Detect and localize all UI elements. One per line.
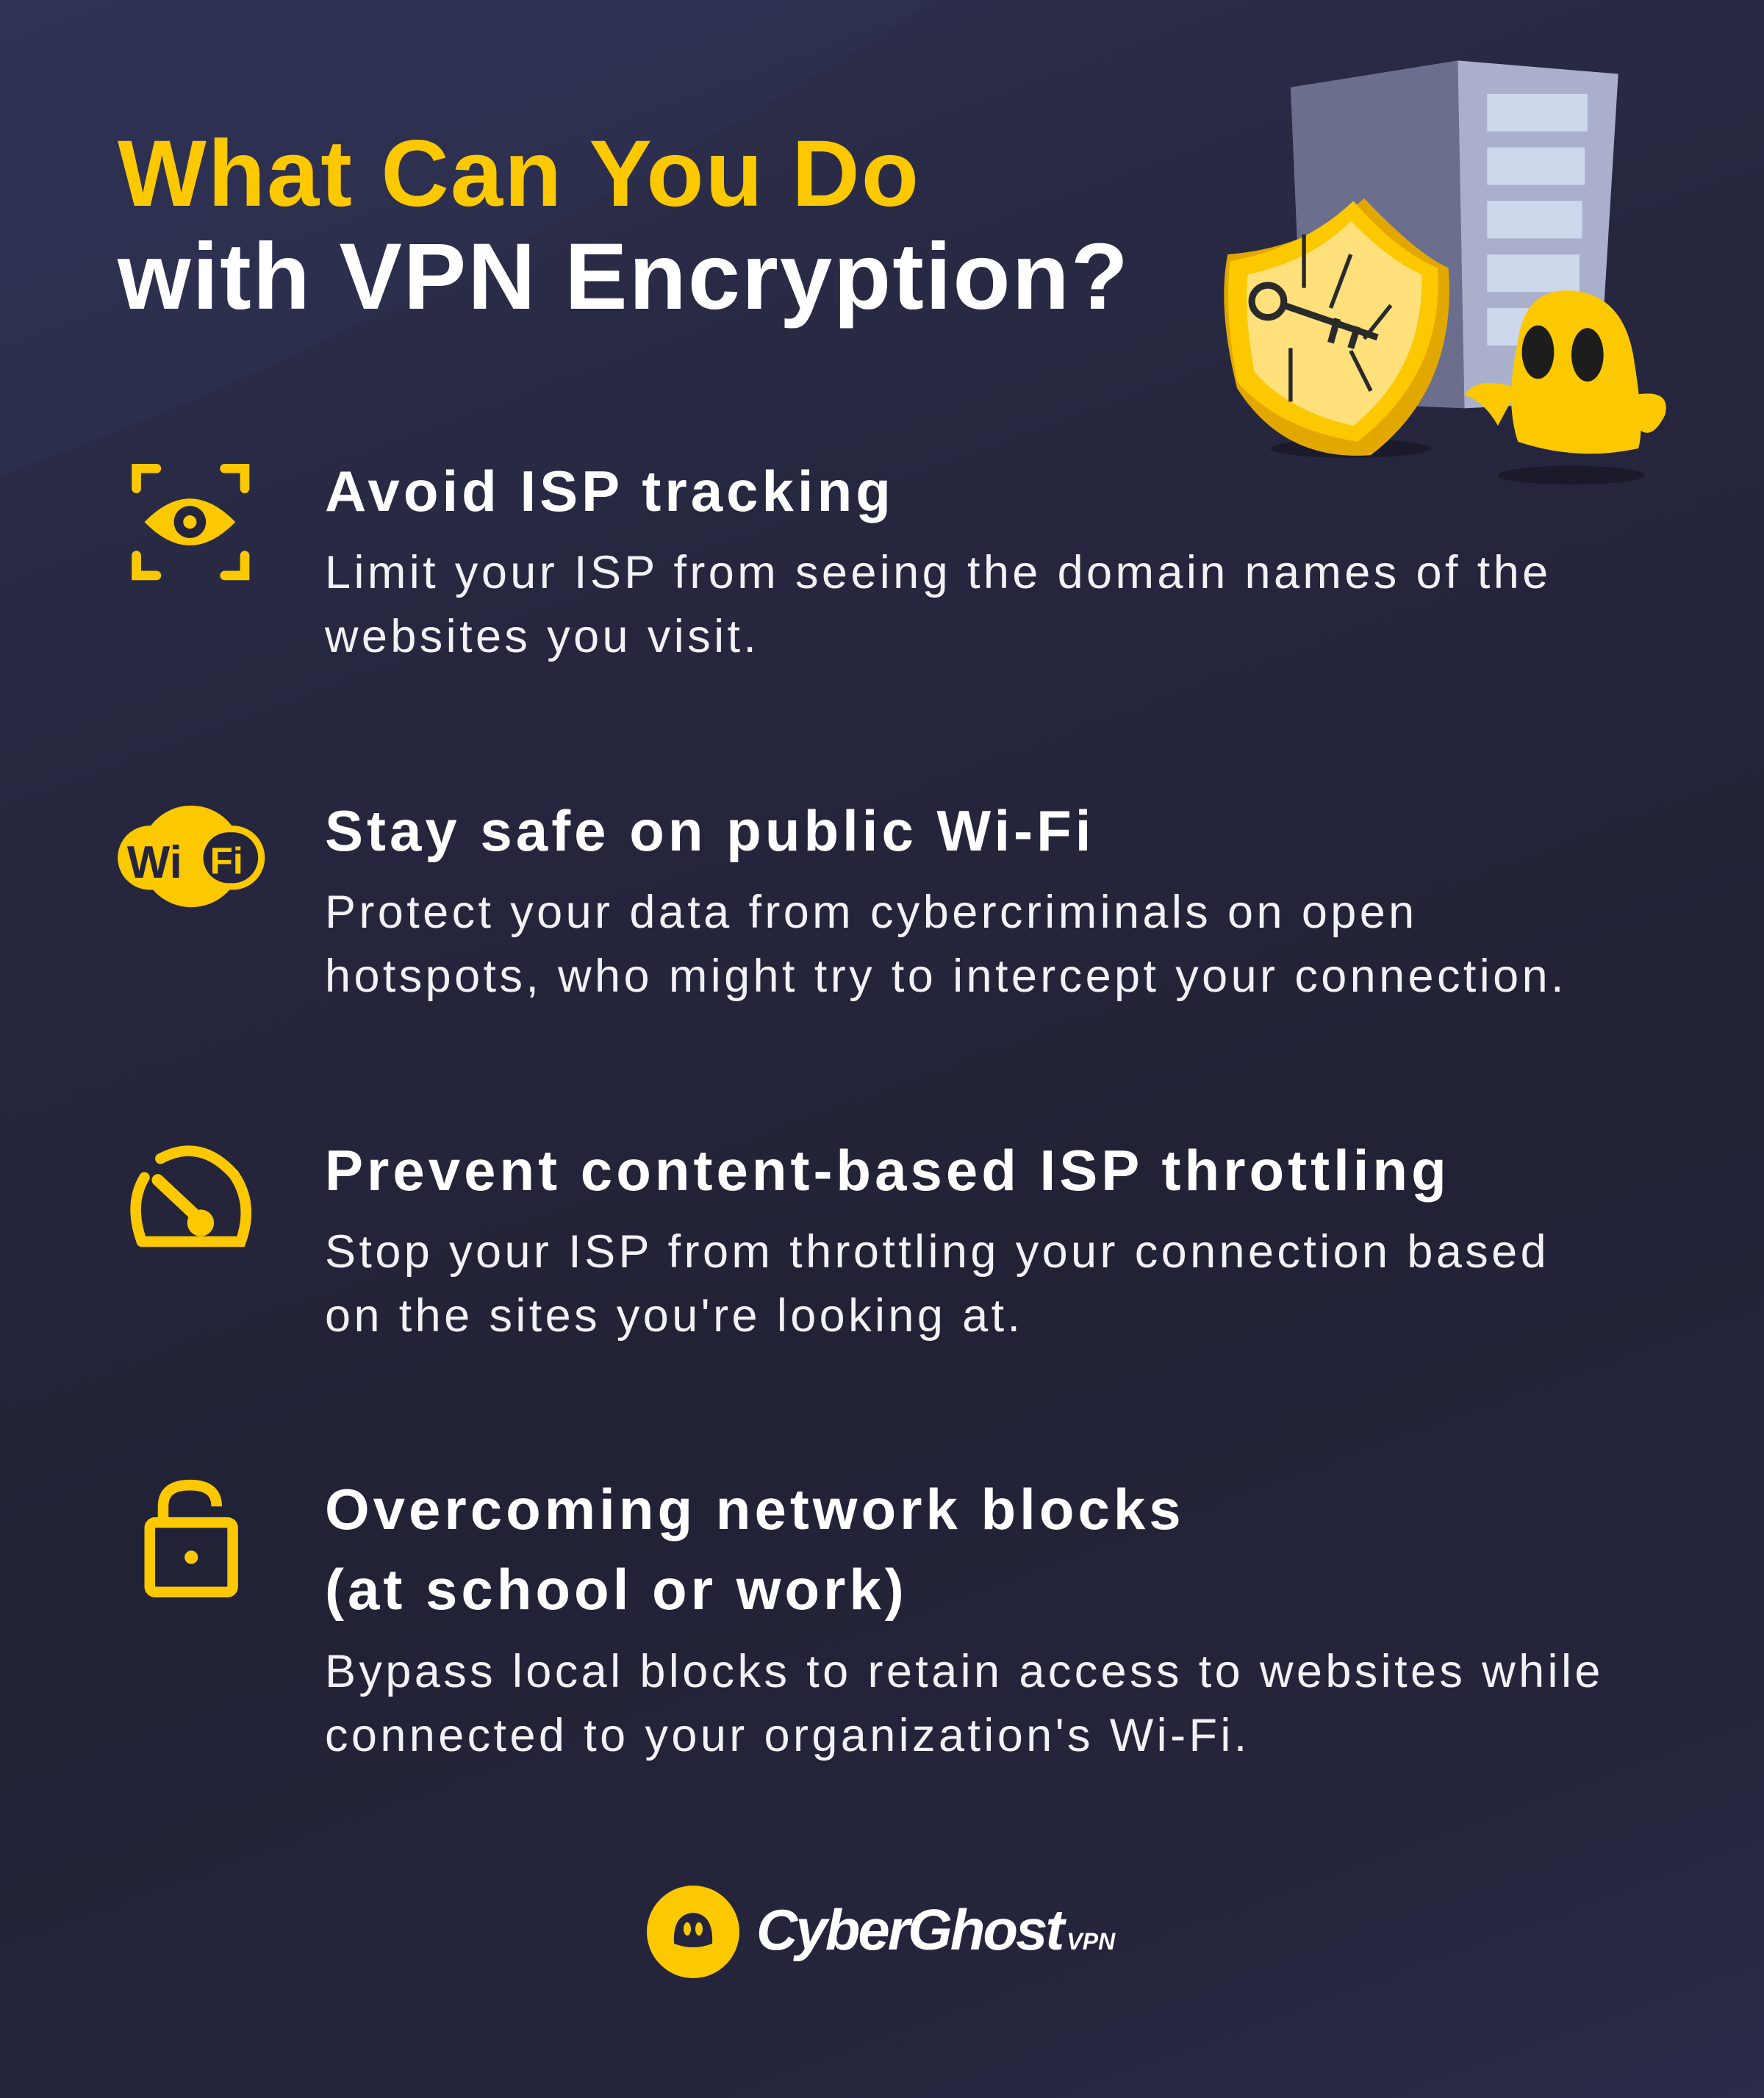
item 3 text: Stop your ISP from throttling your connection based: [325, 1226, 1549, 1278]
title: What Can You Do: [118, 121, 920, 226]
item 2 text: [325, 887, 1567, 1002]
item 4 heading: [325, 1477, 1185, 1622]
item 1 text: [325, 547, 1552, 662]
item 1 text: Limit your ISP from seeing the domain names of the: [325, 547, 1552, 598]
logo: [647, 1886, 1116, 1978]
item 4 text: connected to your organization's Wi-Fi.: [325, 1710, 1250, 1761]
item 2 text: hotspots, who might try to intercept your connection.: [325, 950, 1567, 1002]
item 2 text: Protect your data from cybercriminals on open: [325, 887, 1418, 938]
item 4 heading: (at school or work): [325, 1557, 908, 1622]
icon: wifi badge: Wi: [127, 837, 182, 888]
item 4 heading: Overcoming network blocks: [325, 1477, 1185, 1542]
item 2 heading: Stay safe on public Wi-Fi: [325, 798, 1094, 863]
item 1 heading: Avoid ISP tracking: [325, 459, 894, 523]
title: [118, 121, 1130, 329]
item 3 text: on the sites you're looking at.: [325, 1290, 1023, 1342]
icon: wifi badge: Fi: [210, 840, 243, 882]
item 3 text: [325, 1226, 1549, 1342]
item 4 text: Bypass local blocks to retain access to websites while: [325, 1646, 1604, 1697]
item 4 text: [325, 1646, 1604, 1761]
logo: CyberGhostVPN: [756, 1897, 1115, 1962]
item 3 heading: Prevent content-based ISP throttling: [325, 1138, 1450, 1203]
item 1 text: websites you visit.: [325, 611, 759, 662]
title: with VPN Encryption?: [118, 224, 1130, 329]
